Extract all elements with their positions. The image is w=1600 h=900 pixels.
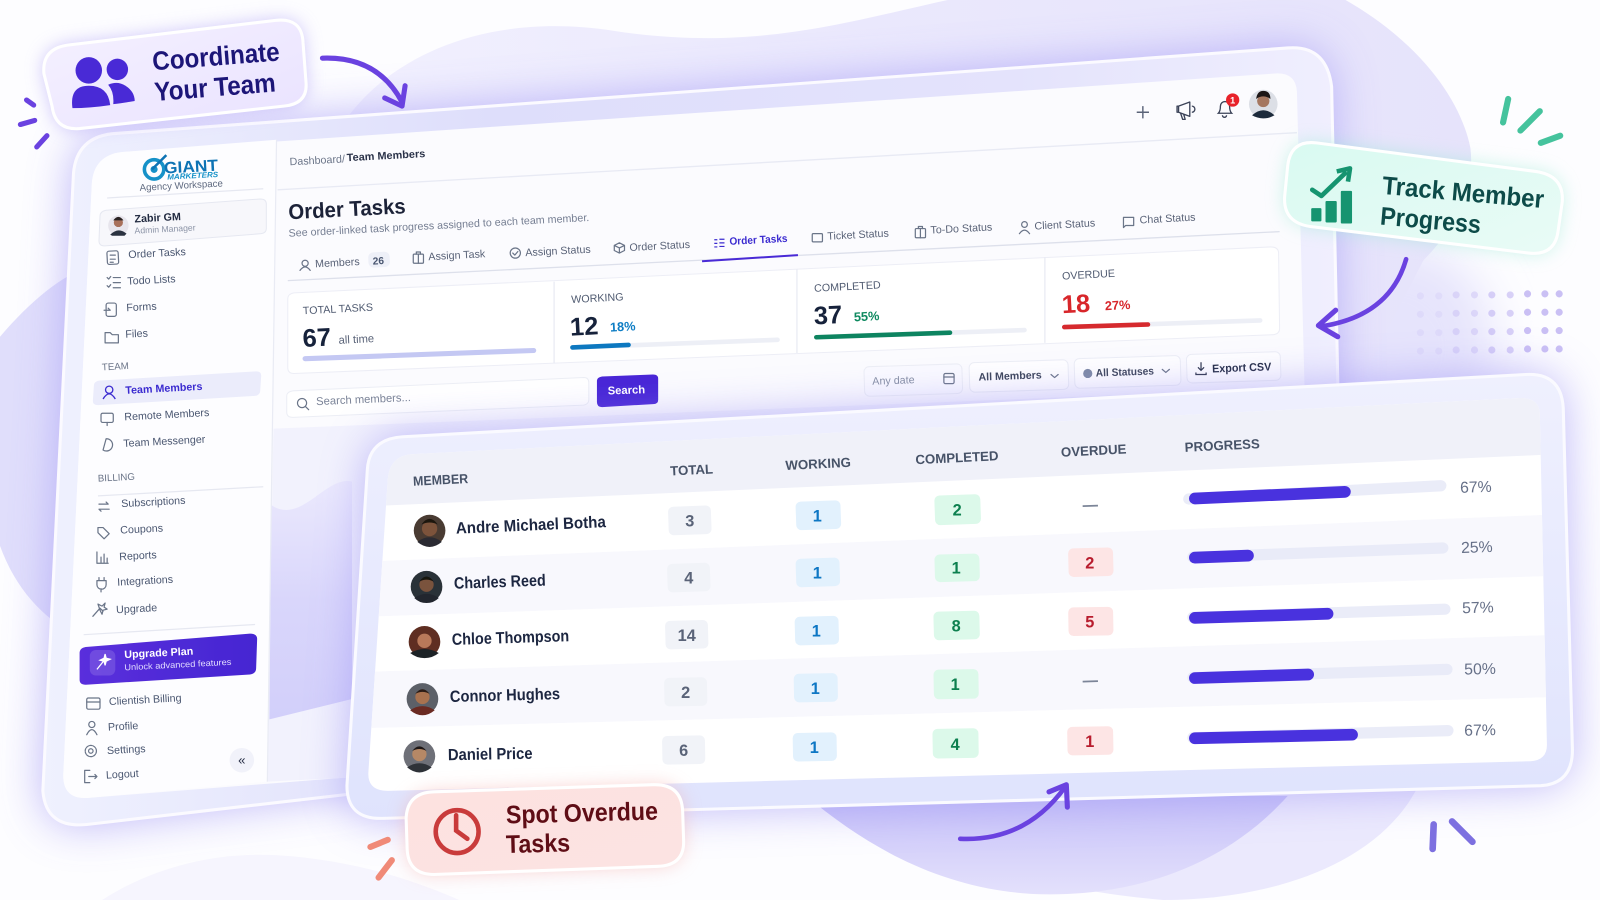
panel: dashboard window — [43, 48, 1339, 825]
sidebar menu: main — [104, 246, 186, 343]
stat: overdue — [1061, 268, 1260, 327]
user profile card: Admin Manager — [134, 222, 196, 236]
filters: All Statuses — [1096, 366, 1154, 380]
arrow: spot overdue to table — [960, 785, 1067, 839]
table header: TOTAL — [670, 461, 713, 479]
row: Connor Hughes — [407, 661, 1496, 715]
row: Connor Hughes: 1 — [951, 676, 960, 694]
row: Connor Hughes: 2 — [681, 684, 690, 702]
logo: GIANT — [164, 157, 219, 177]
callout: coordinate your team: Coordinate — [151, 36, 281, 76]
filters: All Members — [978, 369, 1042, 384]
table rows — [386, 398, 1540, 506]
stat: working: 12 — [569, 312, 599, 342]
tabs: Members — [315, 256, 360, 270]
callout: track member progress: Track Member — [1381, 172, 1545, 214]
top bar icons: 1 — [1230, 96, 1235, 106]
tabs: Ticket Status — [827, 228, 889, 243]
callout: spot overdue tasks: Tasks — [506, 829, 571, 859]
button: upgrade plan: Upgrade Plan — [124, 646, 194, 661]
sidebar menu: team: Remote Members — [124, 407, 210, 423]
row: Connor Hughes: 1 — [811, 680, 820, 698]
row: Charles Reed: 4 — [684, 570, 693, 588]
sidebar menu: main: Todo Lists — [127, 273, 176, 288]
row: Andre Michael Botha: 1 — [813, 507, 822, 525]
accent marks: coordinate — [20, 100, 47, 147]
logo: MARKETERS — [167, 170, 219, 182]
sidebar menu: billing: BILLING — [98, 472, 135, 485]
row: Andre Michael Botha: Andre Michael Botha — [456, 513, 607, 538]
main area background behind table — [267, 388, 1305, 782]
callout: coordinate your team: Your Team — [153, 68, 277, 107]
table header: MEMBER — [413, 471, 469, 489]
row: Andre Michael Botha: 2 — [953, 501, 962, 519]
breadcrumb: Team Members — [346, 148, 426, 164]
sidebar menu: account: Settings — [107, 743, 146, 757]
row: Andre Michael Botha — [414, 479, 1492, 547]
page title: See order-linked task progress assigned to each team member. — [288, 212, 590, 240]
row: Andre Michael Botha: 3 — [685, 513, 694, 531]
button: upgrade plan — [80, 634, 257, 685]
sidebar menu: account: Logout — [106, 768, 139, 782]
icon: growth chart — [1311, 168, 1352, 223]
tabs: Assign Status — [525, 244, 591, 259]
row: Chloe Thompson: 57% — [1462, 599, 1494, 617]
stat: total tasks: all time — [338, 333, 374, 347]
tabs: Client Status — [1034, 217, 1095, 233]
stat: overdue: 18 — [1061, 290, 1091, 319]
sidebar menu: team — [93, 361, 261, 451]
stat: completed: 37 — [813, 301, 843, 330]
user profile card — [99, 199, 266, 246]
table header — [413, 436, 1260, 489]
row: Daniel Price: Daniel Price — [448, 745, 533, 764]
tabs: Order Tasks — [729, 233, 788, 248]
row: Daniel Price — [404, 722, 1496, 772]
sidebar menu: main: Files — [125, 328, 148, 341]
row: Charles Reed: 25% — [1461, 539, 1493, 557]
search bar: Search members... — [316, 392, 411, 408]
stat: total tasks — [302, 302, 534, 359]
stat: completed — [813, 279, 1024, 337]
callout: track member progress: Progress — [1379, 203, 1482, 239]
stat: overdue: OVERDUE — [1062, 268, 1115, 283]
button: upgrade plan: Unlock advanced features — [124, 657, 232, 672]
stat: completed: 55% — [853, 308, 880, 324]
button: search: Search — [608, 384, 645, 398]
breadcrumb — [289, 148, 426, 168]
tabs — [288, 212, 1280, 281]
stat: working: WORKING — [571, 291, 624, 306]
logo — [139, 155, 223, 194]
stat: overdue: 27% — [1104, 297, 1131, 313]
callout: spot overdue tasks: Spot Overdue — [506, 797, 658, 829]
row: Chloe Thompson: 8 — [952, 618, 961, 636]
button: search — [597, 374, 658, 407]
callout: track member progress — [1285, 143, 1562, 253]
sidebar menu: billing: Integrations — [117, 574, 173, 589]
stat: completed: COMPLETED — [814, 279, 881, 295]
user profile card: Zabir GM — [134, 211, 181, 225]
icon: clock — [436, 810, 479, 853]
row: Andre Michael Botha: 67% — [1460, 479, 1492, 497]
row: Chloe Thompson — [409, 599, 1494, 658]
sidebar menu: billing: Upgrade — [116, 602, 158, 616]
row: Chloe Thompson: 14 — [678, 627, 696, 645]
table header: WORKING — [785, 455, 851, 473]
sidebar menu: main: Forms — [126, 301, 157, 314]
sidebar menu: main: Order Tasks — [128, 246, 186, 261]
callout: coordinate your team — [44, 20, 306, 129]
table header: OVERDUE — [1061, 442, 1127, 460]
row: Connor Hughes: 50% — [1464, 661, 1496, 678]
sidebar menu: account: Clientish Billing — [109, 692, 182, 708]
row: Daniel Price: 1 — [1085, 733, 1094, 751]
sidebar menu: billing: Subscriptions — [121, 495, 186, 510]
row: Daniel Price: 4 — [951, 736, 960, 754]
sidebar menu: billing — [84, 472, 263, 635]
row: Daniel Price: 1 — [810, 739, 819, 757]
accent marks: track — [1503, 99, 1560, 143]
row: Chloe Thompson: 5 — [1085, 614, 1094, 632]
sidebar menu: team: Team Messenger — [123, 434, 206, 450]
panel: members table — [347, 374, 1572, 818]
stat: total tasks: 67 — [302, 323, 332, 353]
page title: Order Tasks — [288, 194, 406, 224]
tabs: To-Do Status — [930, 221, 993, 237]
row: Charles Reed: 1 — [813, 565, 822, 583]
search bar — [287, 378, 589, 417]
tabs: 26 — [372, 256, 385, 268]
arrow: coordinate to dashboard — [322, 58, 405, 106]
row: Chloe Thompson: Chloe Thompson — [452, 627, 569, 649]
stat cards — [288, 247, 1280, 373]
sidebar menu: billing: Reports — [119, 549, 157, 563]
tabs: Order Status — [629, 239, 690, 254]
top bar icons — [1137, 90, 1278, 119]
sidebar menu: team: TEAM — [102, 361, 129, 373]
table header: PROGRESS — [1184, 436, 1260, 455]
sidebar menu: billing: Coupons — [120, 522, 163, 537]
row: Daniel Price: 67% — [1464, 722, 1496, 740]
row: Chloe Thompson: 1 — [812, 623, 821, 641]
dotted pattern — [1417, 290, 1563, 355]
filters: Export CSV — [1212, 361, 1272, 375]
accent marks: bottom right — [1433, 821, 1472, 849]
stat: total tasks: TOTAL TASKS — [303, 302, 373, 317]
breadcrumb: Dashboard/ — [289, 153, 345, 168]
logo: Agency Workspace — [139, 178, 223, 194]
row: Charles Reed: 1 — [952, 559, 961, 577]
page title — [288, 194, 590, 240]
filters — [864, 352, 1281, 396]
callout: spot overdue tasks — [406, 785, 684, 874]
row: Charles Reed — [411, 539, 1493, 603]
sidebar — [63, 133, 1297, 798]
accent marks: spot overdue — [370, 840, 392, 878]
stat: working — [569, 291, 778, 347]
sidebar menu: team: Team Members — [125, 381, 203, 397]
icon: team people — [72, 57, 135, 108]
row: Daniel Price: 6 — [679, 742, 688, 760]
sidebar menu: account: « — [238, 752, 246, 767]
row: Charles Reed: 2 — [1085, 554, 1094, 572]
row: Connor Hughes: Connor Hughes — [450, 685, 560, 706]
sidebar menu: account — [85, 692, 254, 783]
stat: working: 18% — [610, 318, 636, 335]
row: Charles Reed: Charles Reed — [454, 572, 546, 593]
table header: COMPLETED — [915, 448, 999, 467]
sidebar menu: account: Profile — [108, 720, 139, 734]
filters: Any date — [872, 374, 915, 388]
tabs: Chat Status — [1139, 212, 1196, 226]
tabs: Assign Task — [428, 248, 486, 263]
arrow: progress to dashboard — [1318, 259, 1406, 337]
